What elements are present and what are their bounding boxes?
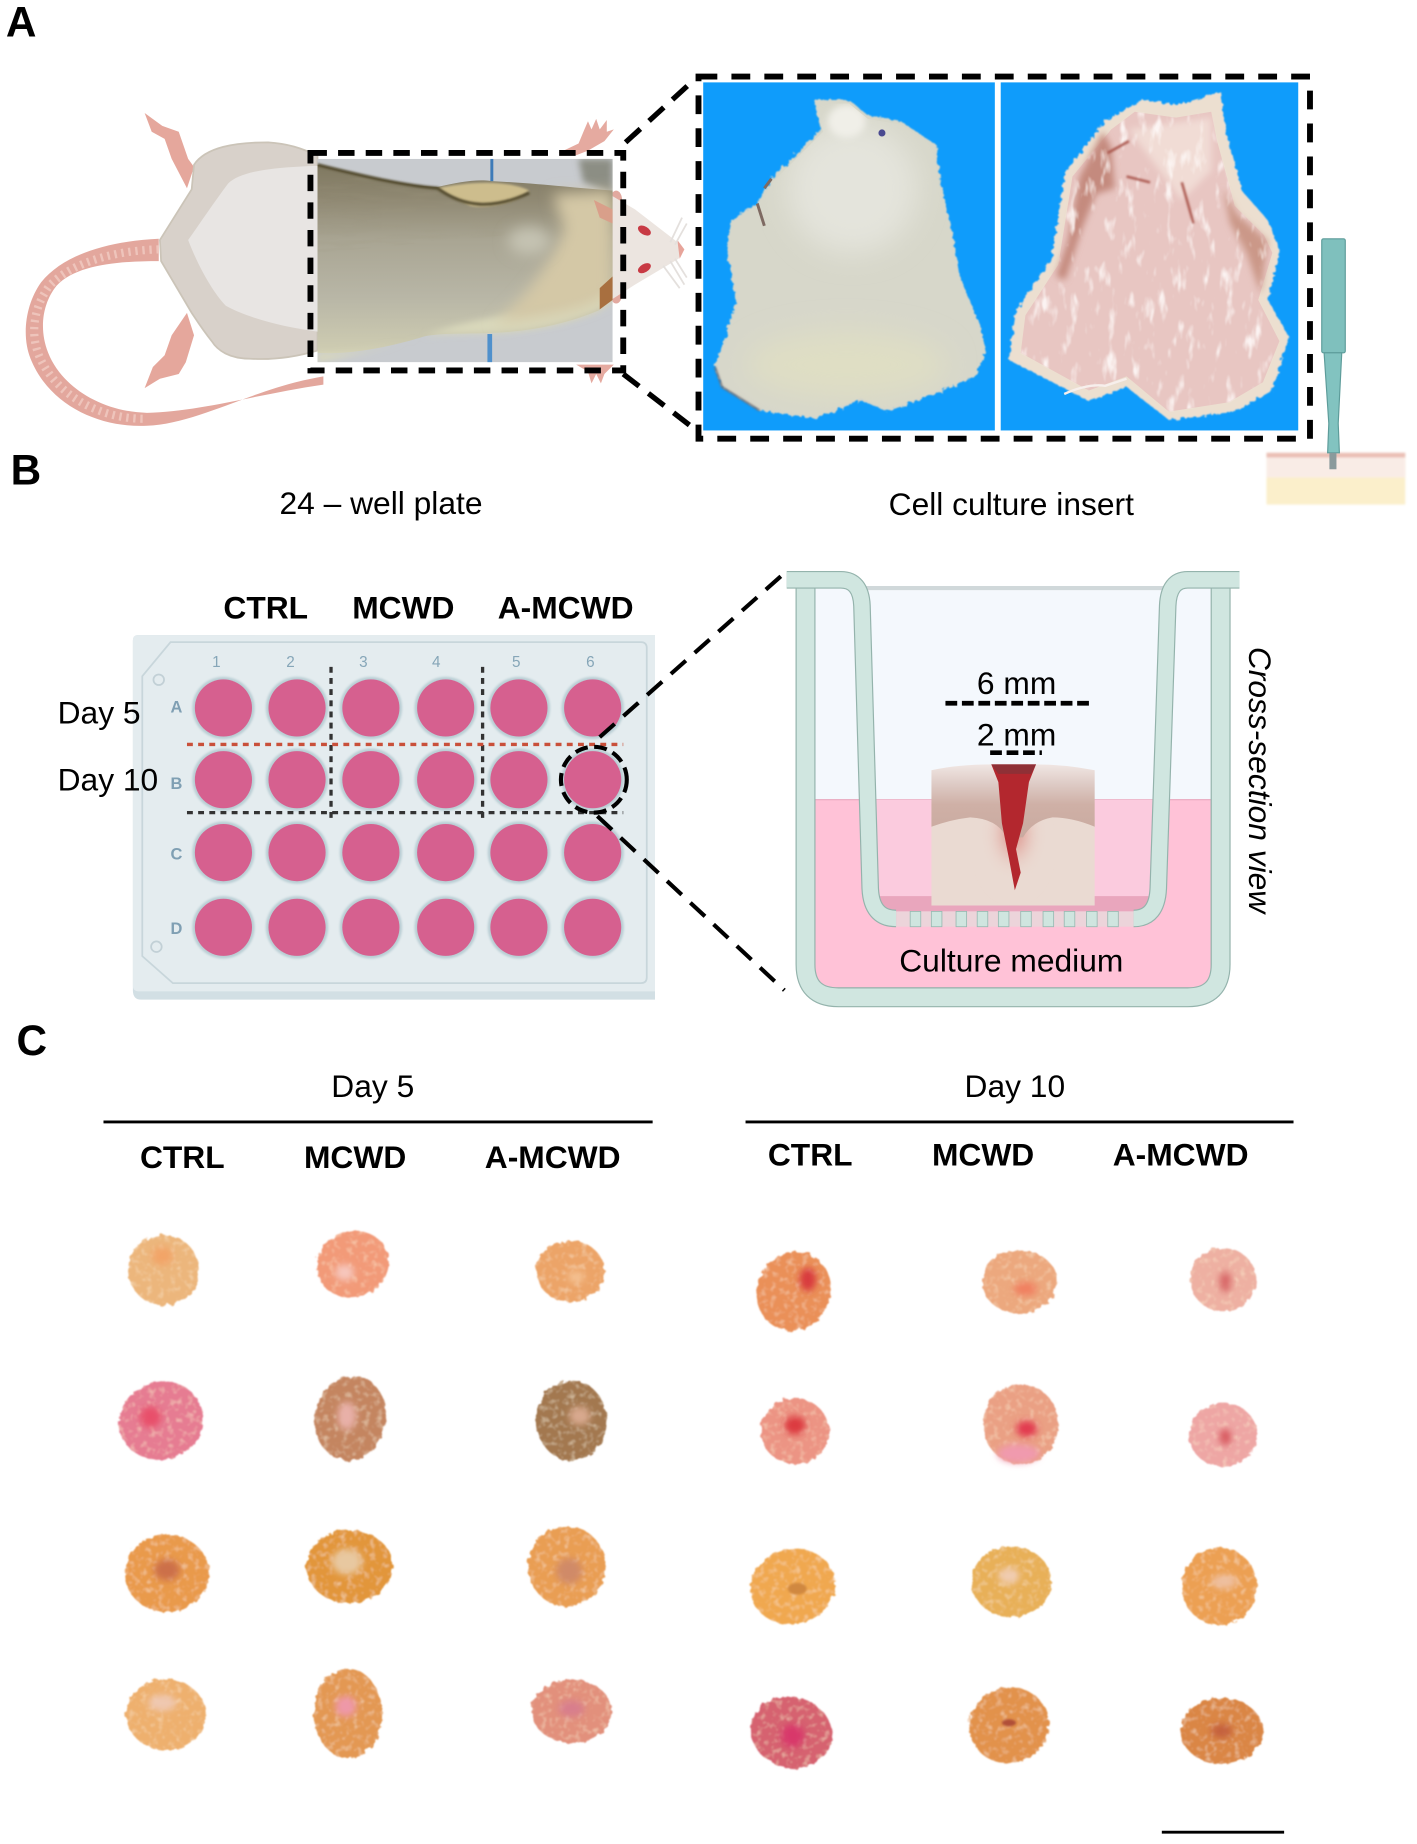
panel C: Day 5 skin explants [108, 1221, 611, 1758]
explant D5 CTRL 3 [125, 1535, 209, 1612]
dashed line: 6 mm width [945, 701, 1092, 705]
heading: cell culture insert: Cell culture insert [889, 486, 1134, 522]
label: Day 5: Day 5 [331, 1068, 414, 1104]
label: CTRL: CTRL [140, 1139, 225, 1175]
column numbers: 4 [432, 654, 441, 671]
label: cross-section view: Cross-section view [1242, 647, 1278, 915]
group separators [187, 667, 623, 822]
plate inner outline [142, 642, 647, 983]
explant D10 A-MCWD 4 [1181, 1698, 1263, 1764]
outer well wall [806, 587, 1221, 997]
highlighted well [561, 747, 627, 813]
explant D10 CTRL 4 [743, 1687, 840, 1777]
icon: rat head [609, 194, 683, 301]
icon: rat body [160, 142, 318, 359]
row letters: D [170, 920, 182, 938]
explant D5 A-MCWD 2 [536, 1381, 607, 1461]
zoom rectangle around pelts [699, 77, 1310, 439]
well rims [192, 677, 624, 958]
panel C label: C [16, 1017, 47, 1064]
medium inside insert [868, 800, 1159, 911]
membrane with pores [893, 911, 1137, 927]
label: MCWD: MCWD [932, 1136, 1034, 1172]
icon: rat back highlight [188, 166, 318, 332]
rule [103, 1121, 653, 1123]
explant D5 A-MCWD 3 [528, 1526, 606, 1606]
explant D5 MCWD 4 [314, 1669, 382, 1758]
insert wall with flange [787, 580, 1239, 918]
column numbers: 5 [512, 654, 520, 671]
panel B: plate group labels [223, 590, 634, 626]
explant D10 MCWD 3 [971, 1546, 1051, 1617]
pink layer above membrane [876, 896, 1154, 911]
row letters: A [170, 699, 182, 717]
explant D5 A-MCWD 1 [536, 1241, 604, 1302]
label: Day 5: Day 5 [58, 694, 141, 730]
icon: rat eyes [636, 223, 653, 275]
explant D10 MCWD 2 [983, 1384, 1058, 1464]
panel B: 24-well plate [133, 635, 655, 1000]
column numbers [212, 654, 595, 671]
explant D10 A-MCWD 3 [1182, 1548, 1257, 1625]
icon: rat nose [677, 240, 684, 259]
label: MCWD: MCWD [304, 1139, 406, 1175]
icon: rat upper hind leg [145, 113, 194, 188]
explant D10 CTRL 2 [761, 1398, 829, 1464]
panel C: Day 10 skin explants [742, 1240, 1263, 1777]
wells with medium [195, 679, 621, 956]
column numbers: 3 [359, 654, 368, 671]
explant D5 A-MCWD 4 [532, 1679, 611, 1743]
label: culture medium: Culture medium [899, 942, 1123, 978]
label: CTRL: CTRL [768, 1136, 853, 1172]
row letters: B [170, 775, 182, 793]
explant D5 CTRL 1 [128, 1235, 199, 1305]
photo: rat dorsal skin [318, 159, 613, 362]
column numbers: 6 [586, 654, 595, 671]
skin wound section [931, 764, 1095, 906]
rule [746, 1121, 1294, 1123]
plate notches [151, 674, 164, 952]
explant D10 A-MCWD 1 [1190, 1248, 1256, 1311]
column numbers: 1 [212, 654, 221, 671]
upper air space [815, 588, 1211, 801]
label: A-MCWD: A-MCWD [485, 1139, 621, 1175]
photo: pelt fur side [715, 100, 985, 419]
column numbers: 2 [286, 654, 295, 671]
icon: biopsy punch over skin [1266, 239, 1405, 505]
icon: rat whiskers [663, 218, 687, 288]
label: MCWD: MCWD [352, 590, 454, 626]
panel C: Day 10 header [746, 1068, 1294, 1172]
top lid line [864, 586, 1164, 590]
label: A-MCWD: A-MCWD [498, 590, 634, 626]
dashed line: 2 mm width [990, 751, 1042, 755]
explant D10 A-MCWD 2 [1189, 1403, 1257, 1466]
icon: rat tail [26, 239, 323, 426]
explant D5 MCWD 2 [307, 1370, 394, 1467]
zoom arrow lines to pelts [623, 80, 695, 429]
skin layers [1266, 453, 1405, 505]
icon: rat lower paw [576, 365, 614, 383]
label: 2 mm: 2 mm [977, 717, 1056, 753]
heading: 24 well plate: 24 – well plate [280, 485, 482, 521]
panel A: rat with photographs [26, 113, 687, 426]
plate body [133, 635, 655, 1000]
label: CTRL: CTRL [223, 590, 308, 626]
zoom arrow lines to insert [591, 576, 784, 990]
explant D5 MCWD 1 [307, 1221, 398, 1308]
explant D10 MCWD 4 [959, 1676, 1059, 1774]
scale bar [1162, 1831, 1284, 1833]
explant D10 MCWD 1 [982, 1250, 1057, 1314]
plate top face [133, 635, 655, 991]
panel B label: B [11, 447, 41, 494]
label: Day 10: Day 10 [58, 761, 158, 797]
panel C: Day 5 header [103, 1068, 653, 1175]
panel B: cell culture insert cross-section [787, 580, 1239, 997]
icon: rat upper paw [559, 119, 614, 155]
photo: blue background right [1001, 82, 1298, 430]
culture medium [815, 800, 1211, 988]
icon: rat ears [610, 191, 622, 303]
photo: blue background left [703, 82, 995, 430]
icon: rat lower hind leg [145, 313, 194, 388]
explant D10 CTRL 3 [742, 1539, 843, 1634]
zoom rectangle around rat [310, 153, 623, 370]
label: Day 10: Day 10 [965, 1068, 1065, 1104]
explant D10 CTRL 1 [744, 1240, 844, 1343]
photo: pelt dermal side [1009, 92, 1289, 420]
row letters: C [170, 846, 182, 864]
explant D5 CTRL 4 [126, 1679, 206, 1750]
explant D5 MCWD 3 [306, 1530, 393, 1603]
row letters [170, 699, 182, 938]
explant D5 CTRL 2 [108, 1370, 214, 1472]
punch tool [1322, 239, 1345, 469]
label: 6 mm: 6 mm [977, 665, 1056, 701]
label: A-MCWD: A-MCWD [1113, 1136, 1249, 1172]
panel A: excised skin photographs [699, 77, 1310, 439]
